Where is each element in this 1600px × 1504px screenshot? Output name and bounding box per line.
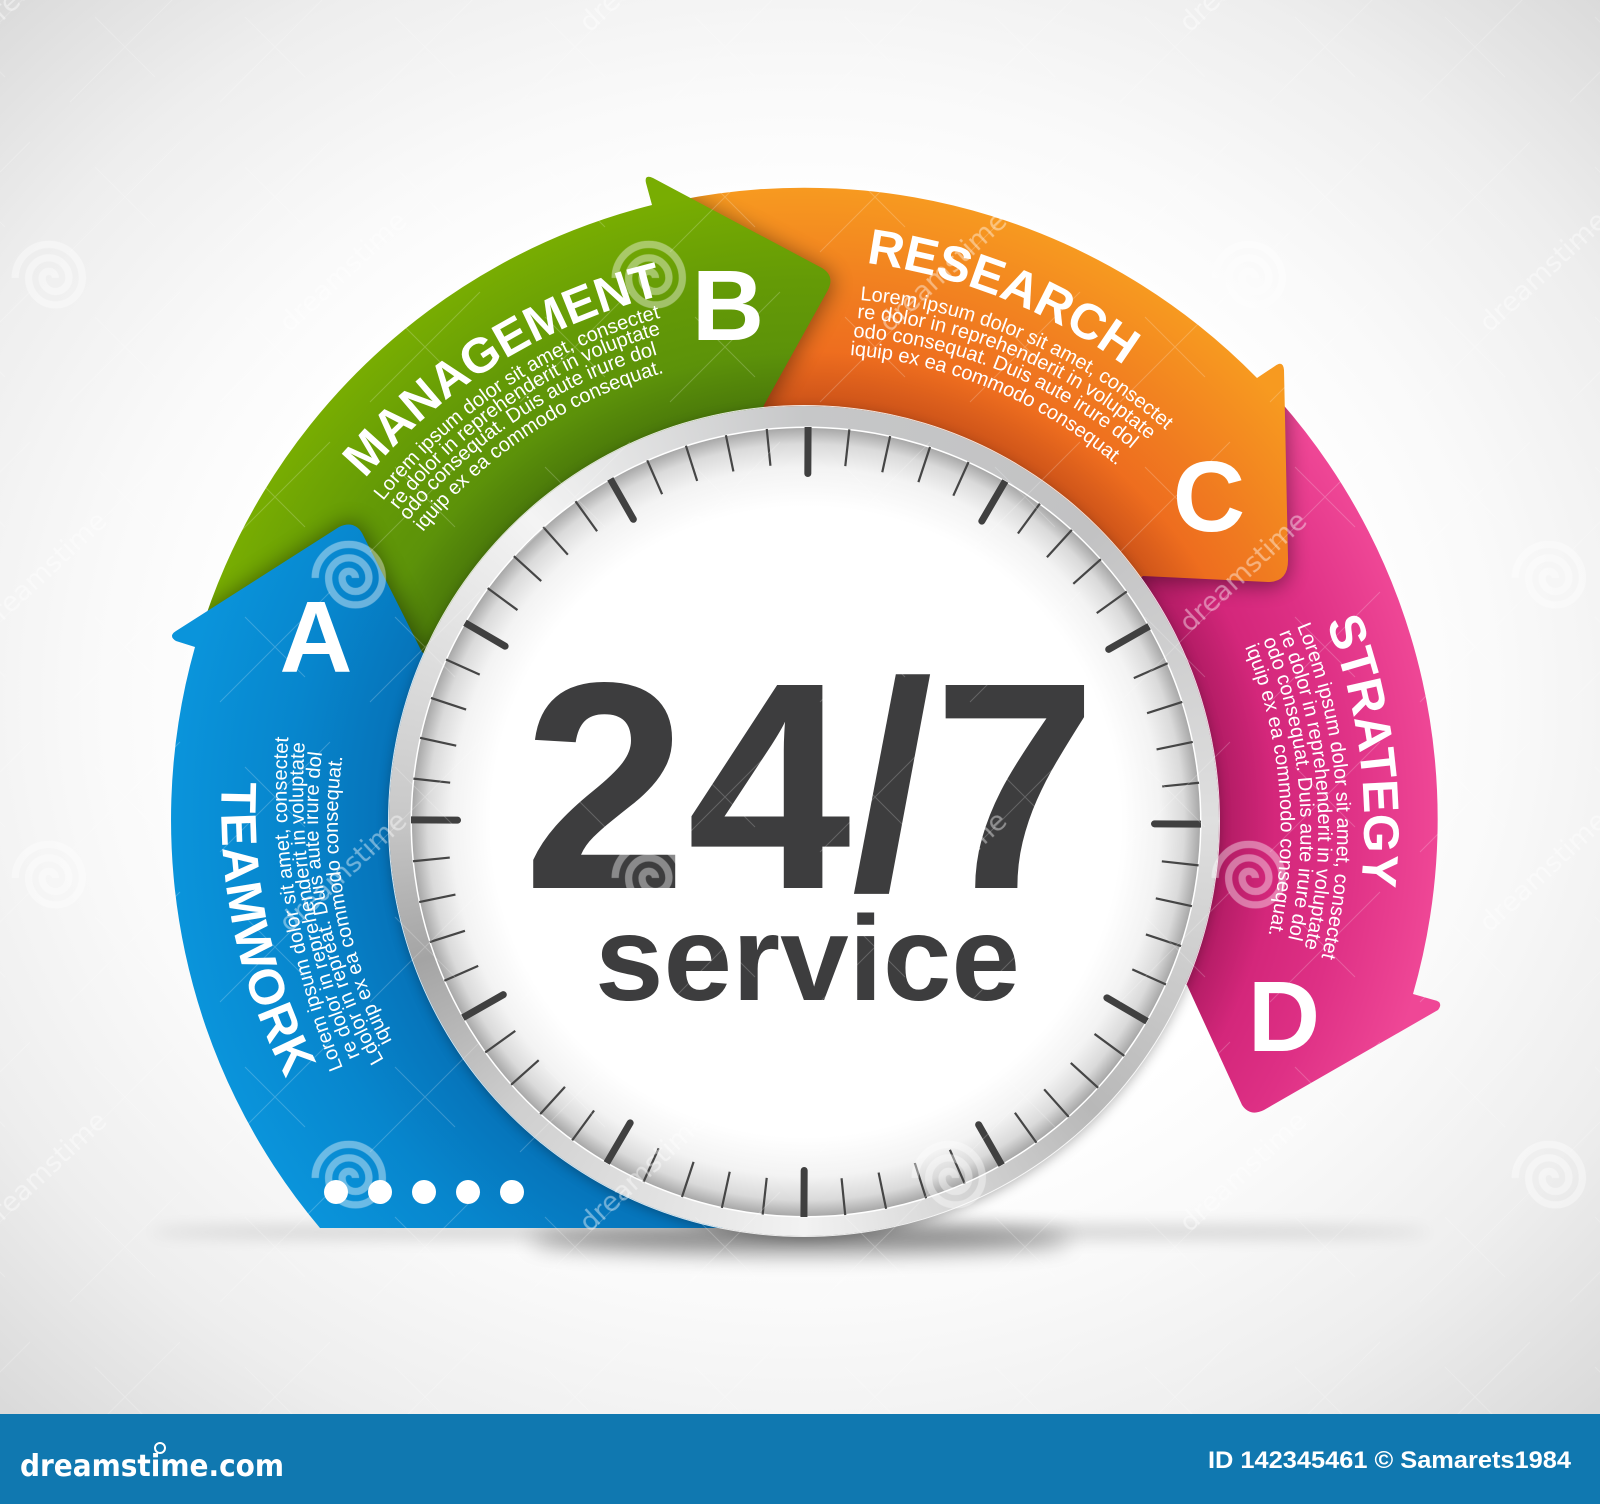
subtitle: service: service [595, 890, 1020, 1026]
text block: strategy body: Lorem ipsum dolor sit amet, consectet [1298, 622, 1352, 960]
panel: A teamwork arrow [171, 524, 723, 1228]
text block: management body: odo consequat. Duis aute irure dol [402, 341, 656, 519]
panel: C research arrow [690, 188, 1288, 582]
ground shadow [150, 1224, 1430, 1254]
text block: research body: Lorem ipsum dolor sit amet, consectet [862, 286, 1173, 430]
five white dots [324, 1180, 524, 1204]
letter D: D [1248, 961, 1320, 1073]
letter B: B [692, 250, 764, 362]
watermark overlay: dreamstime [1173, 1105, 1313, 1238]
text block: management body: iquip ex ea commodo consequat. [412, 362, 662, 531]
watermark overlay: dreamstime [873, 205, 1013, 338]
watermark overlay: dreamstime [573, 505, 713, 638]
text block: teamwork body: Ldolor in repreat. Duis aute irure dol [304, 752, 384, 1066]
watermark overlay: dreamstime [873, 805, 1013, 938]
title: 24/7: 24/7 [523, 621, 1097, 951]
heading: management: MANAGEMENT [342, 262, 656, 476]
clock ticks [409, 425, 1203, 1219]
panel: D strategy arrow [1140, 406, 1440, 1113]
watermark overlay: dreamstime [273, 205, 413, 338]
panel: B management arrow [208, 176, 830, 654]
chart: segmented arrow ring [171, 176, 1440, 1268]
watermark overlay: dreamstime [573, 1105, 713, 1238]
heading: research: RESEARCH [869, 229, 1141, 364]
text block: management body: Lorem ipsum dolor sit amet, consectet [373, 306, 660, 500]
text block: strategy body: odo consequat. Duis aute irure dol [1264, 638, 1314, 941]
text block: strategy body: iquip ex ea commodo consequat. [1246, 642, 1296, 934]
heading: teamwork: TEAMWORK [221, 783, 316, 1078]
banner logo: dreamstime.com [20, 1449, 284, 1484]
text block: strategy body: re dolor in reprehenderit in voluptate [1280, 630, 1333, 949]
clock metal ring [389, 406, 1219, 1236]
text block: management body: re dolor in reprehenderit in voluptate [390, 325, 660, 509]
text block: teamwork body: Lorem ipsum dolor sit amet, consectet [274, 736, 342, 1072]
watermark overlay: dreamstime [273, 805, 413, 938]
text block: teamwork body: iquip ex ea commodo consequat. [326, 758, 392, 1046]
text block: research body: iquip ex ea commodo consequat. [851, 340, 1119, 465]
footer banner [0, 1414, 1600, 1504]
text block: teamwork body: re dolor in reprehenderit in voluptate [288, 743, 360, 1059]
text block: research body: re dolor in reprehenderit in voluptate [858, 307, 1154, 438]
text block: strategy body [1246, 622, 1352, 960]
watermark overlay: dreamstime [1173, 505, 1313, 638]
heading: strategy: STRATEGY [1330, 616, 1399, 888]
text block: research body: odo consequat. Duis aute irure dol [854, 324, 1140, 448]
letter C: C [1173, 441, 1245, 553]
letter A: A [280, 582, 352, 694]
banner image id: ID 142345461 © Samarets1984 [1208, 1447, 1572, 1474]
